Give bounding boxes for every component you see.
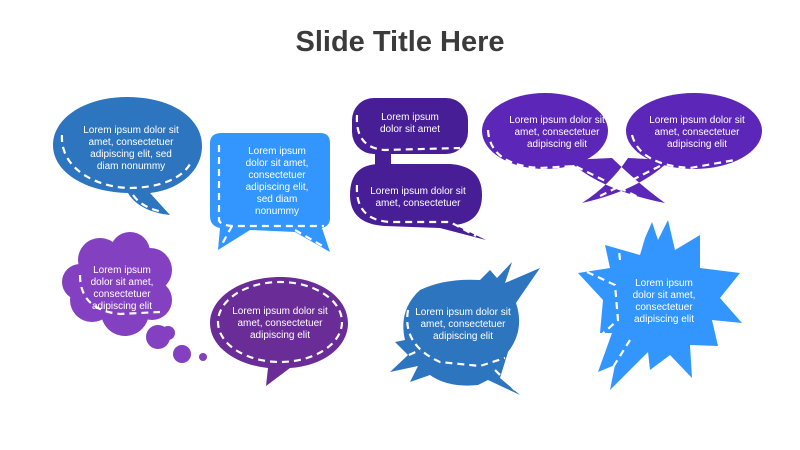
bubble 1: oval speech blue [53,97,202,215]
bubble 1: oval speech blue: diam nonummy [97,161,165,172]
bubble 3: stacked deep purple: dolor sit amet [380,124,440,135]
bubble 8: star burst light blue: consectetuer [635,302,693,313]
bubble 7: spiky blue: adipiscing elit [433,331,493,342]
bubble 8: star burst light blue: Lorem ipsum [635,278,693,289]
bubble 2: rounded rectangle light blue: dolor sit amet, [246,158,308,169]
bubble 2: rounded rectangle light blue: nonummy [255,206,299,217]
bubble 6: plum oval [210,277,348,386]
bubble 6: plum oval: amet, consectetuer [237,318,323,329]
bubble 6: plum oval: adipiscing elit [250,330,310,341]
bubble 5: thought cloud purple: dolor sit amet, [91,277,153,288]
bubble 2: rounded rectangle light blue: sed diam [257,194,297,205]
bubble 7: spiky blue [390,262,540,395]
bubble 2: rounded rectangle light blue: adipiscing elit, [246,182,308,193]
bubble 5: thought cloud purple: consectetuer [93,289,151,300]
bubble 6: plum oval: Lorem ipsum dolor sit [232,306,328,317]
bubble 8: star burst light blue [578,220,742,390]
bubble 7: spiky blue: amet, consectetuer [420,319,506,330]
bubble 1: oval speech blue: adipiscing elit, sed [90,149,172,160]
bubble 8: star burst light blue: adipiscing elit [634,314,694,325]
bubble 4: twin violet ovals [482,93,762,203]
bubble 1: oval speech blue: Lorem ipsum dolor sit [83,125,179,136]
bubble 2: rounded rectangle light blue: consectetuer [248,170,306,181]
bubble 7: spiky blue: Lorem ipsum dolor sit [415,307,511,318]
bubble 3: stacked deep purple: Lorem ipsum dolor sit [370,186,466,197]
bubble 4: twin violet ovals: amet, consectetuer [654,127,740,138]
bubble 8: star burst light blue: dolor sit amet, [633,290,695,301]
bubble 1: oval speech blue: amet, consectetuer [88,137,174,148]
bubble 4: twin violet ovals: Lorem ipsum dolor sit [649,115,745,126]
bubble 2: rounded rectangle light blue: Lorem ipsum [248,146,306,157]
bubble 3: stacked deep purple [350,98,486,240]
bubble 5: thought cloud purple: adipiscing elit [92,301,152,312]
bubble 4: twin violet ovals: Lorem ipsum dolor sit [509,115,605,126]
bubble 5: thought cloud purple: Lorem ipsum [93,265,151,276]
bubble 4: twin violet ovals: adipiscing elit [667,139,727,150]
bubble 5: thought cloud purple [62,232,207,363]
bubble 3: stacked deep purple: Lorem ipsum [381,112,439,123]
bubble 3: stacked deep purple: amet, consectetuer [375,198,461,209]
bubble 4: twin violet ovals: amet, consectetuer [514,127,600,138]
bubble 2: rounded rectangle light blue [210,133,330,252]
title: Slide Title Here [296,26,504,58]
bubble 4: twin violet ovals: adipiscing elit [527,139,587,150]
